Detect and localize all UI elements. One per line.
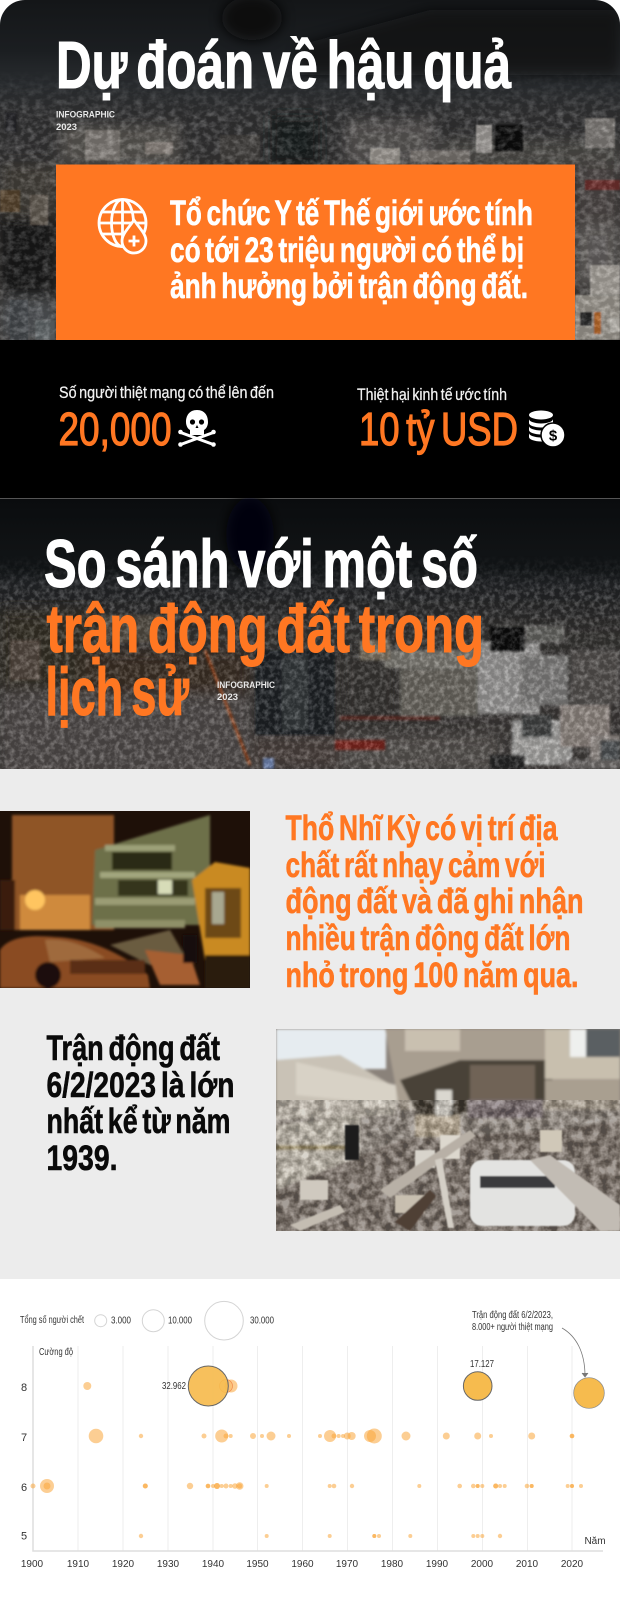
infographic tag: 2023 xyxy=(217,692,238,702)
x axis years: 1960 xyxy=(291,1559,314,1570)
x axis years: 2020 xyxy=(561,1559,584,1570)
stat: economic damage: Thiệt hại kinh tế ước tính xyxy=(357,385,507,404)
y axis label and ticks: 7 xyxy=(21,1432,27,1444)
x axis years: 2000 xyxy=(471,1559,494,1570)
x axis years: 1980 xyxy=(381,1559,404,1570)
highlighted bubble: 1939 xyxy=(162,1366,228,1406)
x axis years: 1910 xyxy=(67,1559,90,1570)
callout: WHO estimate xyxy=(56,164,575,340)
text: largest since 1939: 1939. xyxy=(46,1139,118,1178)
chart legend: 3.000 xyxy=(111,1316,131,1326)
annotation: 2023 earthquake: Trận động đất 6/2/2023, xyxy=(472,1309,553,1321)
x axis years: 2010 xyxy=(516,1559,539,1570)
stat: death toll xyxy=(58,383,274,455)
stat: economic damage: 10 tỷ USD xyxy=(359,403,518,455)
arrow: annotation to 2023 bubble xyxy=(562,1328,588,1377)
x axis years xyxy=(21,1536,606,1570)
city photo background xyxy=(0,0,620,340)
section heading xyxy=(44,526,484,730)
x axis years: Năm xyxy=(584,1536,606,1547)
text: largest since 1939: Trận động đất xyxy=(46,1029,220,1068)
minor bubbles xyxy=(30,1380,583,1538)
stat: death toll: 20,000 xyxy=(58,403,172,455)
panel: key stats on black xyxy=(0,340,620,498)
y axis label and ticks xyxy=(21,1347,73,1542)
panel: context on grey background xyxy=(0,769,620,1279)
text: largest since 1939: nhất kể từ năm xyxy=(46,1102,230,1141)
y axis label and ticks: 8 xyxy=(21,1382,27,1394)
x axis years: 1930 xyxy=(157,1559,180,1570)
chart legend: 10.000 xyxy=(168,1316,192,1326)
infographic tag: INFOGRAPHIC xyxy=(217,680,275,690)
x axis years: 1990 xyxy=(426,1559,449,1570)
panel: comparison hero with city photo xyxy=(0,497,620,775)
aerial disaster photo background xyxy=(0,497,620,775)
y axis label and ticks: 6 xyxy=(21,1482,27,1494)
section heading: lịch sử xyxy=(46,654,190,730)
chart legend xyxy=(20,1301,274,1340)
highlighted bubble: 1999 xyxy=(463,1359,494,1400)
infographic tag: 2023 xyxy=(56,122,77,132)
text: largest since 1939 xyxy=(46,1029,234,1178)
infographic tag: INFOGRAPHIC xyxy=(56,110,115,120)
bubble chart: earthquakes by year, magnitude and deaths xyxy=(20,1301,606,1570)
icon: skull and crossbones xyxy=(178,410,216,447)
icon: globe with medical drop xyxy=(99,200,146,253)
annotation: 2023 earthquake xyxy=(472,1309,553,1333)
x axis years: 1900 xyxy=(21,1559,44,1570)
infographic tag xyxy=(56,110,115,132)
panel: top hero with city photo xyxy=(0,0,620,340)
chart legend: 30.000 xyxy=(250,1316,274,1326)
infographic tag xyxy=(217,680,275,702)
y axis label and ticks: 5 xyxy=(21,1530,27,1542)
x axis years: 1950 xyxy=(246,1559,269,1570)
highlighted bubble: 1999: 17.127 xyxy=(470,1359,494,1370)
highlighted bubble: 1939: 32.962 xyxy=(162,1381,186,1392)
photo: collapsed building and crushed car xyxy=(276,1029,620,1231)
text: largest since 1939: 6/2/2023 là lớn xyxy=(46,1066,234,1105)
x axis years: 1970 xyxy=(336,1559,359,1570)
chart legend: Tổng số người chết xyxy=(20,1314,84,1326)
photo: night rescue scene xyxy=(0,811,250,988)
x axis years: 1940 xyxy=(202,1559,225,1570)
callout text xyxy=(170,194,533,306)
annotation: 2023 earthquake: 8.000+ người thiệt mạng xyxy=(472,1322,553,1333)
icon: coin stack with dollar xyxy=(529,410,565,447)
highlighted bubble: 2023 xyxy=(574,1378,604,1408)
icon: coin stack with dollar: $ xyxy=(549,428,558,444)
stat: death toll: Số người thiệt mạng có thể lên đến xyxy=(59,383,274,402)
text: Turkey geology note xyxy=(286,809,584,995)
x axis years: 1920 xyxy=(112,1559,135,1570)
y axis label and ticks: Cường độ xyxy=(39,1347,73,1358)
